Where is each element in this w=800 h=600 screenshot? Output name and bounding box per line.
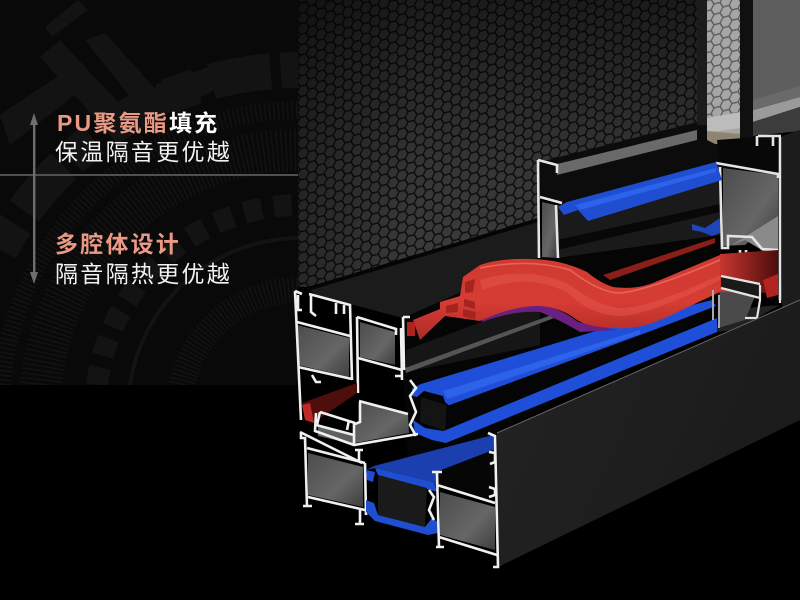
upper-right frame profile [538, 160, 562, 258]
black foam core: upper [420, 397, 447, 431]
right frame block [715, 130, 800, 332]
frame rail under the mesh [308, 122, 753, 318]
blue gasket: main upper [412, 300, 716, 408]
lower sash section [315, 401, 418, 445]
double arrow [30, 113, 38, 284]
black inter-gasket zone [446, 310, 717, 430]
bottom blue surround and foam [366, 468, 438, 535]
gasket chambers [446, 279, 476, 320]
left profile, second box [357, 317, 402, 393]
bottom left profile [300, 432, 366, 524]
blue gasket: main lower [413, 318, 717, 443]
central mullion [403, 317, 416, 436]
blue gasket: upper right [558, 162, 722, 221]
text block: PU foam filling: 保温隔音更优越 [55, 139, 232, 165]
right red clip and slim profile [713, 274, 780, 328]
central cavity [403, 165, 722, 470]
dark red gasket continuation [720, 250, 778, 293]
mesh screen panel [298, 0, 697, 287]
rule: horizontal divider [0, 174, 305, 176]
left profile, upper [295, 291, 352, 420]
glass unit at top right [697, 0, 800, 144]
text block: multi-cavity design: 多腔体设计 [55, 231, 181, 257]
blue gasket: small right [692, 218, 720, 236]
text block: multi-cavity design: 隔音隔热更优越 [55, 261, 232, 287]
red clip front [407, 322, 415, 336]
dark cavity behind bottom right [436, 450, 493, 505]
text block: multi-cavity design [55, 231, 232, 287]
small red gasket in left profile [302, 383, 357, 423]
bottom right profile [429, 472, 497, 555]
red gasket with wave [407, 255, 722, 340]
background: dark technical pattern [0, 0, 298, 385]
desiccant strip [707, 131, 740, 144]
text block: PU foam filling: PU聚氨酯填充 [57, 110, 219, 136]
bottom blue plate [366, 435, 495, 490]
white profile outline [716, 136, 781, 300]
text block: PU foam filling [55, 110, 232, 165]
large black frame block [488, 300, 800, 567]
